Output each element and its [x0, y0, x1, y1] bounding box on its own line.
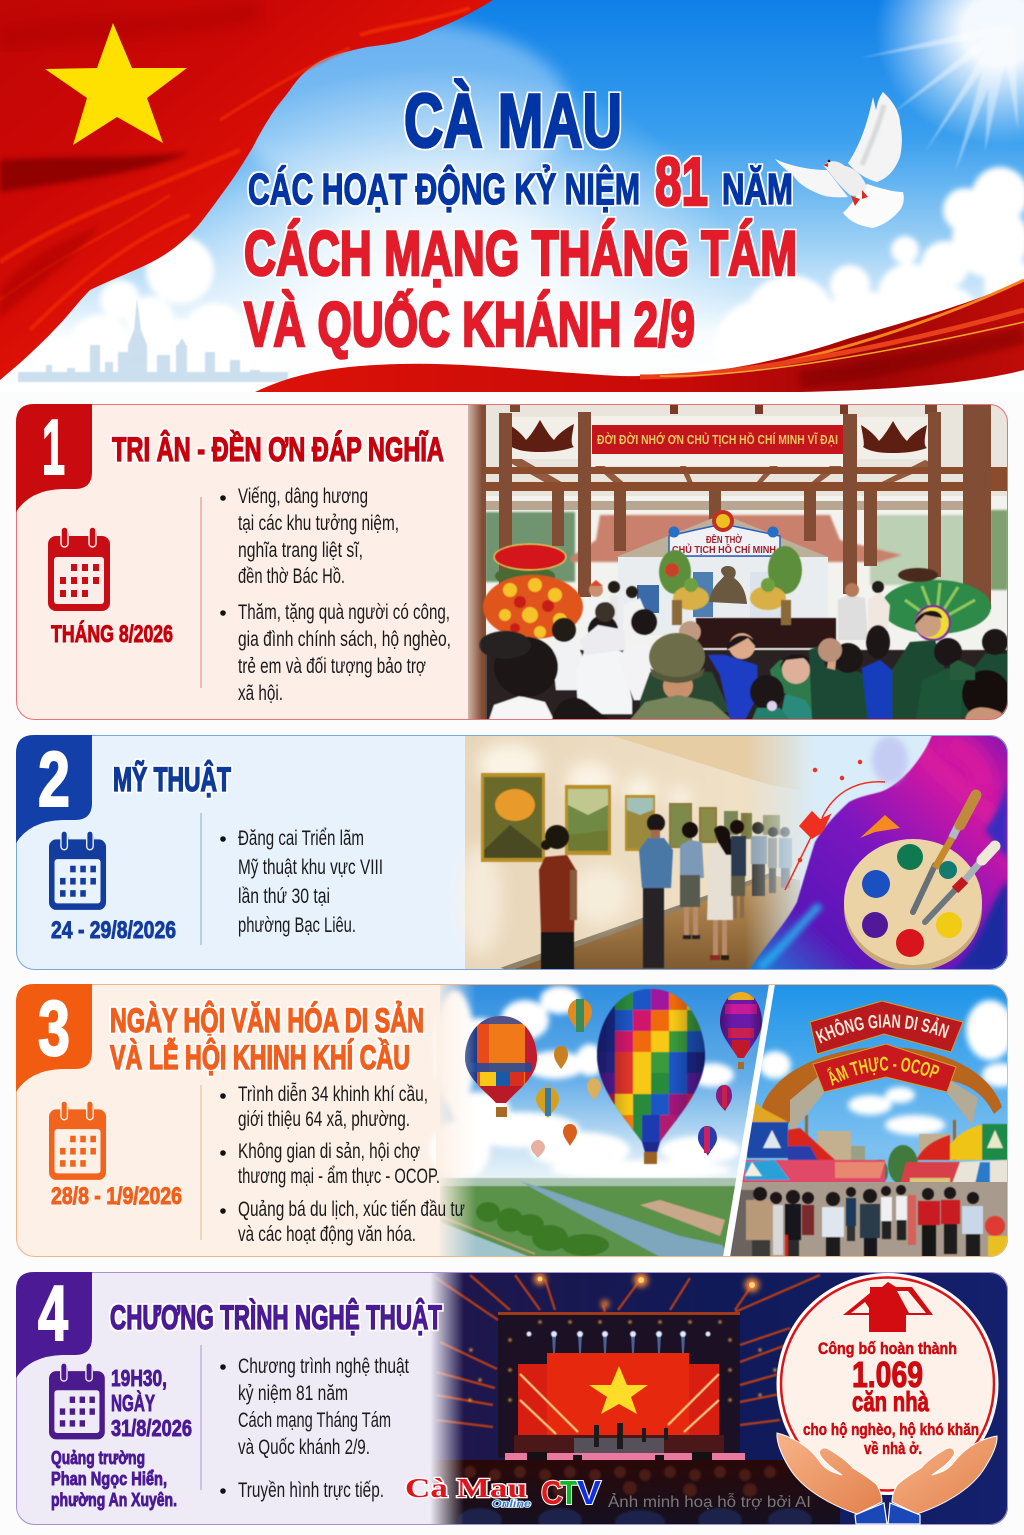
number badge 1	[16, 403, 92, 512]
bullet list 3: và các hoạt động văn hóa.	[238, 1223, 416, 1246]
gate arch	[762, 1047, 1002, 1130]
title line 4: VÀ QUỐC KHÁNH 2/9	[244, 289, 695, 360]
date 3: 28/8 - 1/9/2026	[51, 1183, 182, 1210]
teal woman	[782, 694, 812, 719]
altar flowers	[659, 546, 836, 648]
buildings and trees	[805, 1115, 956, 1185]
bullet list 4: Chương trình nghệ thuật	[238, 1355, 409, 1378]
bullet list 4	[220, 1355, 409, 1502]
title line 2: 81	[655, 144, 708, 220]
gate banners: ẨM THỰC - OCOP	[828, 1056, 940, 1086]
icon: white dove	[775, 92, 904, 228]
heading: tri ân: TRI ÂN - ĐỀN ƠN ĐÁP NGHĨA	[112, 431, 444, 469]
art background	[745, 735, 865, 970]
bullet list 4: kỷ niệm 81 năm	[238, 1382, 348, 1405]
white shirts	[552, 638, 582, 690]
time and date 4: 19H30,	[111, 1365, 167, 1391]
photo: concert stage	[430, 1272, 1008, 1534]
bullet list 4: Cách mạng Tháng Tám	[238, 1409, 391, 1432]
logo: CTV: V	[577, 1474, 601, 1511]
venue: Phan Ngọc Hiển,	[51, 1469, 167, 1489]
bottom red ribbon	[253, 280, 1024, 393]
number badge 4	[16, 1269, 92, 1378]
wall light pools	[458, 743, 692, 955]
gate banners	[809, 1000, 964, 1093]
right balloon	[720, 992, 762, 1069]
bullet list 1: Thăm, tặng quà người có công,	[238, 601, 450, 624]
shrine	[616, 510, 828, 617]
bullet list 3: Trình diễn 34 khinh khí cầu,	[238, 1083, 428, 1106]
title line 2: NĂM	[722, 164, 793, 214]
paint splash	[749, 735, 1008, 970]
landscape and river	[440, 1178, 740, 1257]
logo: CTV: T	[560, 1474, 578, 1511]
main title	[244, 79, 797, 360]
title line 2: CÁC HOẠT ĐỘNG KỶ NIỆM	[248, 163, 640, 214]
photo divider	[723, 984, 775, 1257]
logo: Cà Mau Online	[405, 1473, 532, 1510]
heading: ngày hội	[110, 1001, 424, 1077]
gallery visitors	[539, 814, 792, 970]
big balloon	[597, 989, 705, 1164]
venue: phường An Xuyên.	[51, 1490, 177, 1510]
green back	[808, 646, 868, 719]
title line 3: CÁCH MẠNG THÁNG TÁM	[244, 219, 797, 289]
right people	[960, 654, 1008, 720]
palette	[844, 795, 995, 971]
time and date 4: 31/8/2026	[111, 1415, 192, 1441]
callout text: Công bố hoàn thành	[818, 1339, 957, 1358]
sun	[860, 0, 1024, 172]
shrine: ĐỀN THỜ	[706, 533, 742, 546]
header banner	[0, 0, 1024, 505]
pillars	[468, 404, 991, 720]
panel 4: chương trình nghệ thuật	[16, 1269, 1008, 1534]
bullet list 2: lần thứ 30 tại	[238, 885, 330, 908]
logo: CTV	[541, 1474, 601, 1511]
callout text: về nhà ở.	[864, 1439, 922, 1458]
panel 3: ngày hội văn hóa	[16, 984, 1008, 1257]
stage structure	[498, 1312, 740, 1458]
bullet list 3: thương mại - ẩm thực - OCOP.	[238, 1165, 440, 1188]
blue woman	[708, 655, 758, 720]
banner: ĐỜI ĐỜI NHỚ ƠN CHỦ TỊCH HỒ CHÍ MINH VĨ ĐẠI	[597, 432, 838, 447]
time and date 4: NGÀY	[111, 1389, 155, 1416]
red flag screen	[514, 1353, 724, 1453]
officer	[640, 670, 730, 712]
bullet list 1: đền thờ Bác Hồ.	[238, 565, 345, 588]
number badge 1: 1	[42, 403, 65, 491]
callout text	[803, 1339, 979, 1458]
background trees and roofs	[485, 510, 1008, 590]
bullet list 1: trẻ em và đối tượng bảo trợ	[238, 655, 426, 678]
bullet list 1: Viếng, dâng hương	[238, 485, 368, 508]
date 2: 24 - 29/8/2026	[51, 917, 176, 944]
icon: calendar red	[48, 527, 110, 611]
festival scene	[730, 984, 1008, 1257]
bullet list 2: Mỹ thuật khu vực VIII	[238, 856, 383, 879]
caption: AI illustration note: Ảnh minh hoạ hỗ trợ bởi AI	[608, 1492, 811, 1511]
logo: Cà Mau Online: Online	[492, 1499, 532, 1510]
green man	[892, 640, 945, 720]
icon: calendar blue	[49, 831, 106, 910]
callout text: 1.069	[852, 1354, 923, 1395]
panel 2: mỹ thuật	[16, 735, 1008, 971]
number badge 3	[16, 984, 92, 1092]
logo: CTV: C	[541, 1474, 563, 1511]
bullet list 1: xã hội.	[238, 682, 283, 705]
bullet list 2: phường Bạc Liêu.	[238, 914, 356, 937]
icon: house	[843, 1282, 933, 1332]
lotus panels	[502, 417, 931, 459]
heading: ngày hội: VÀ LỄ HỘI KHINH KHÍ CẦU	[110, 1038, 410, 1077]
photo: balloons and festival	[429, 984, 1008, 1257]
photo: temple visit	[460, 404, 1010, 720]
heading: ngày hội: NGÀY HỘI VĂN HÓA DI SẢN	[110, 1001, 424, 1040]
blue back	[862, 660, 895, 720]
bullet list 3	[220, 1083, 465, 1246]
bullet list 3: Không gian di sản, hội chợ	[238, 1140, 420, 1163]
city skyline	[18, 298, 288, 382]
title: Cà Mau: CÀ MAU	[404, 79, 622, 164]
panel 1: tri ân	[16, 403, 1010, 720]
bullet list 3: giới thiệu 64 xã, phường.	[238, 1108, 410, 1131]
ceiling	[468, 404, 1008, 496]
ground	[724, 1182, 1008, 1257]
clouds	[76, 162, 1024, 334]
bullet list 4: và Quốc khánh 2/9.	[238, 1436, 370, 1459]
number badge 2: 2	[38, 735, 70, 823]
bullet list 1	[220, 485, 451, 705]
title line 2	[248, 144, 793, 220]
stage lights	[552, 1334, 685, 1353]
bullet list 2: Đăng cai Triển lãm	[238, 827, 364, 850]
paintings	[481, 773, 780, 862]
bullet list 1: tại các khu tưởng niệm,	[238, 512, 399, 535]
flower wreath	[483, 544, 583, 639]
bullet list 1: nghĩa trang liệt sĩ,	[238, 539, 363, 562]
number badge 3: 3	[38, 984, 70, 1072]
red flag with star	[0, 0, 493, 380]
crowd	[730, 1185, 1008, 1257]
logo: Cà Mau Online: Cà Mau	[405, 1473, 527, 1503]
icon: calendar purple	[49, 1363, 105, 1439]
callout text: căn nhà	[852, 1386, 929, 1417]
heading: chương trình: CHƯƠNG TRÌNH NGHỆ THUẬT	[110, 1299, 442, 1337]
balloon sky clouds	[430, 986, 740, 1180]
callout: 1.069 houses medallion	[776, 1273, 998, 1524]
venue: Quảng trường	[51, 1448, 145, 1468]
market tents	[738, 1100, 1008, 1184]
bullet list 2	[220, 827, 383, 937]
banner	[589, 416, 845, 466]
icon: supporting hands	[777, 1433, 997, 1524]
palm wreath	[881, 568, 991, 640]
bullet list 4: Truyền hình trực tiếp.	[238, 1479, 384, 1502]
icon: calendar orange	[49, 1101, 106, 1180]
small balloons	[531, 999, 732, 1158]
crowd	[479, 580, 1010, 720]
number badge 4: 4	[38, 1269, 68, 1357]
audience	[430, 1460, 840, 1534]
heading: mỹ thuật: MỸ THUẬT	[113, 761, 231, 799]
guards	[588, 596, 607, 627]
shrine: CHỦ TỊCH HỒ CHÍ MINH	[672, 543, 776, 556]
number badge 2	[16, 735, 92, 843]
left balloon	[465, 1016, 537, 1117]
bullet list 3: Quảng bá du lịch, xúc tiến đầu tư	[238, 1198, 465, 1221]
photo: art gallery and palette	[458, 735, 1008, 971]
venue	[51, 1448, 177, 1510]
date 1: THÁNG 8/2026	[51, 620, 173, 648]
bottom-left man	[489, 696, 554, 720]
bullet list 1: gia đình chính sách, hộ nghèo,	[238, 628, 451, 651]
callout text: cho hộ nghèo, hộ khó khăn	[803, 1420, 979, 1439]
gate banners: KHÔNG GIAN DI SẢN	[815, 1014, 950, 1044]
time and date 4	[111, 1365, 192, 1441]
